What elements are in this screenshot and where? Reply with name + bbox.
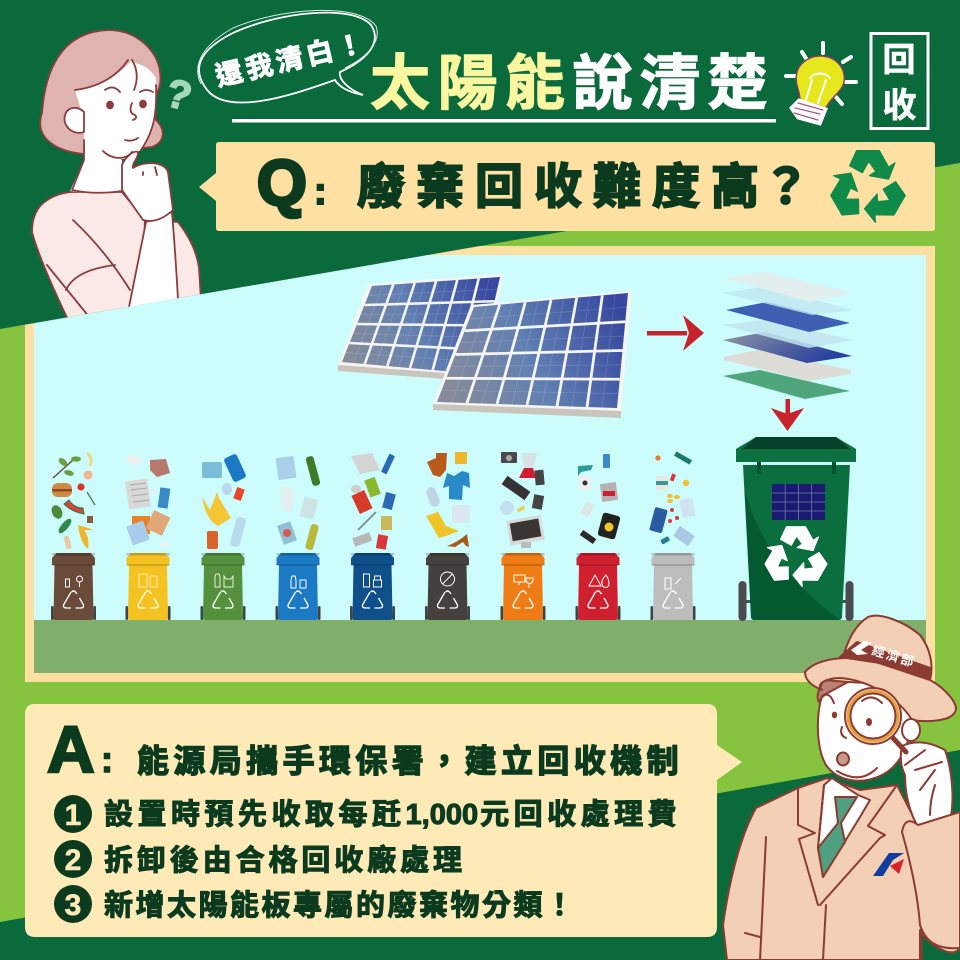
icon: exploded panel layers [723,272,853,399]
chart: grey medical waste bin [649,451,696,620]
chart: dark general waste bin [425,452,470,620]
hat brim [805,658,956,721]
hair [818,680,928,722]
tag: 回收: 收 [882,78,916,127]
icon: large solar recycling bin [736,437,856,621]
answer heading: : [101,739,113,780]
panel: question callout [199,142,935,231]
answer heading: A [47,712,95,786]
title: 太陽能說清楚 [370,35,775,122]
jacket [723,778,960,960]
background: dark green upper diagonal [0,0,960,329]
background: dark green lower diagonal [0,750,960,960]
magnifier [893,738,906,752]
icon: light bulb [786,43,856,124]
arrow: layers to bin [771,399,804,431]
hat crown [843,616,932,680]
hand [901,743,952,830]
badge [873,853,904,876]
ground strip [34,620,926,673]
list item 2: 2 [65,844,81,877]
tag: 回收: 回 [882,33,916,81]
list item 2: 拆卸後由合格回收廠處理 [104,837,466,879]
list item 3: 新增太陽能板專屬的廢棄物分類！ [104,882,577,924]
chart: yellow paper waste bin [125,454,170,620]
chart: orange e-waste bin [500,452,546,620]
question text: 廢棄回收難度高？ [357,147,821,217]
question text: Q [257,147,307,219]
icon: solar panel back [338,274,504,379]
icon: solar panel front [433,291,632,418]
sleeve [902,812,960,948]
ear [902,719,920,741]
illustration: detective with magnifier: 經濟部 [870,640,918,671]
chart: red hazardous waste bin [576,454,621,620]
answer heading: 能源局攜手環保署，建立回收機制 [137,736,683,782]
question text: : [314,171,327,213]
arrow: panels to layers [647,315,704,351]
title underline [232,119,776,122]
chart: green plastic waste bin [200,453,247,620]
tag: 回收 [871,33,928,128]
illustration: thinking woman [32,30,201,328]
illustration: detective with magnifier [723,616,960,960]
icon: question mark: ? [161,71,196,120]
panel: recycling scene [25,246,935,682]
face [818,682,912,781]
chart: brown food waste bin [50,453,96,620]
list item 1: 設置時預先收取每瓩1,000元回收處理費 [104,791,681,833]
answer heading [47,712,683,786]
callout: 還我清白 speech bubble: 還我清白！ [211,21,371,94]
lapels [745,785,922,960]
list item 1: 1 [65,799,81,832]
icon: recycling symbol [823,151,909,229]
panel: answer callout [25,704,742,937]
list item 3: 3 [65,889,81,922]
chart: blue glass waste bin [276,455,321,620]
chart: navy metal waste bin [350,453,396,620]
shirt and tie [818,778,870,877]
hat band [840,642,930,678]
